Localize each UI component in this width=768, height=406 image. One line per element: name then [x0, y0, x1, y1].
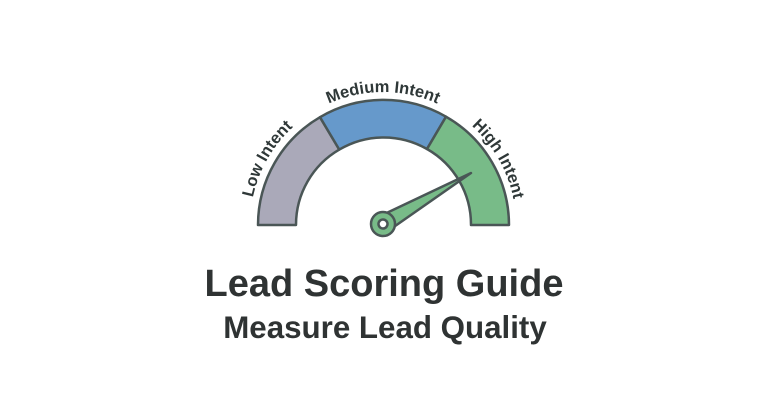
needle: [371, 173, 471, 236]
label: high intent: High Intent: [472, 118, 524, 200]
subtitle: Measure Lead Quality: [223, 310, 547, 345]
gauge: [258, 100, 509, 225]
arc labels: [242, 81, 524, 200]
segment: low intent: [258, 117, 339, 225]
title: Lead Scoring Guide: [205, 263, 563, 305]
label: low intent: Low Intent: [242, 120, 293, 196]
label: medium intent: Medium Intent: [326, 81, 440, 104]
segment: high intent: [427, 117, 509, 225]
segment: medium intent: [320, 100, 446, 150]
